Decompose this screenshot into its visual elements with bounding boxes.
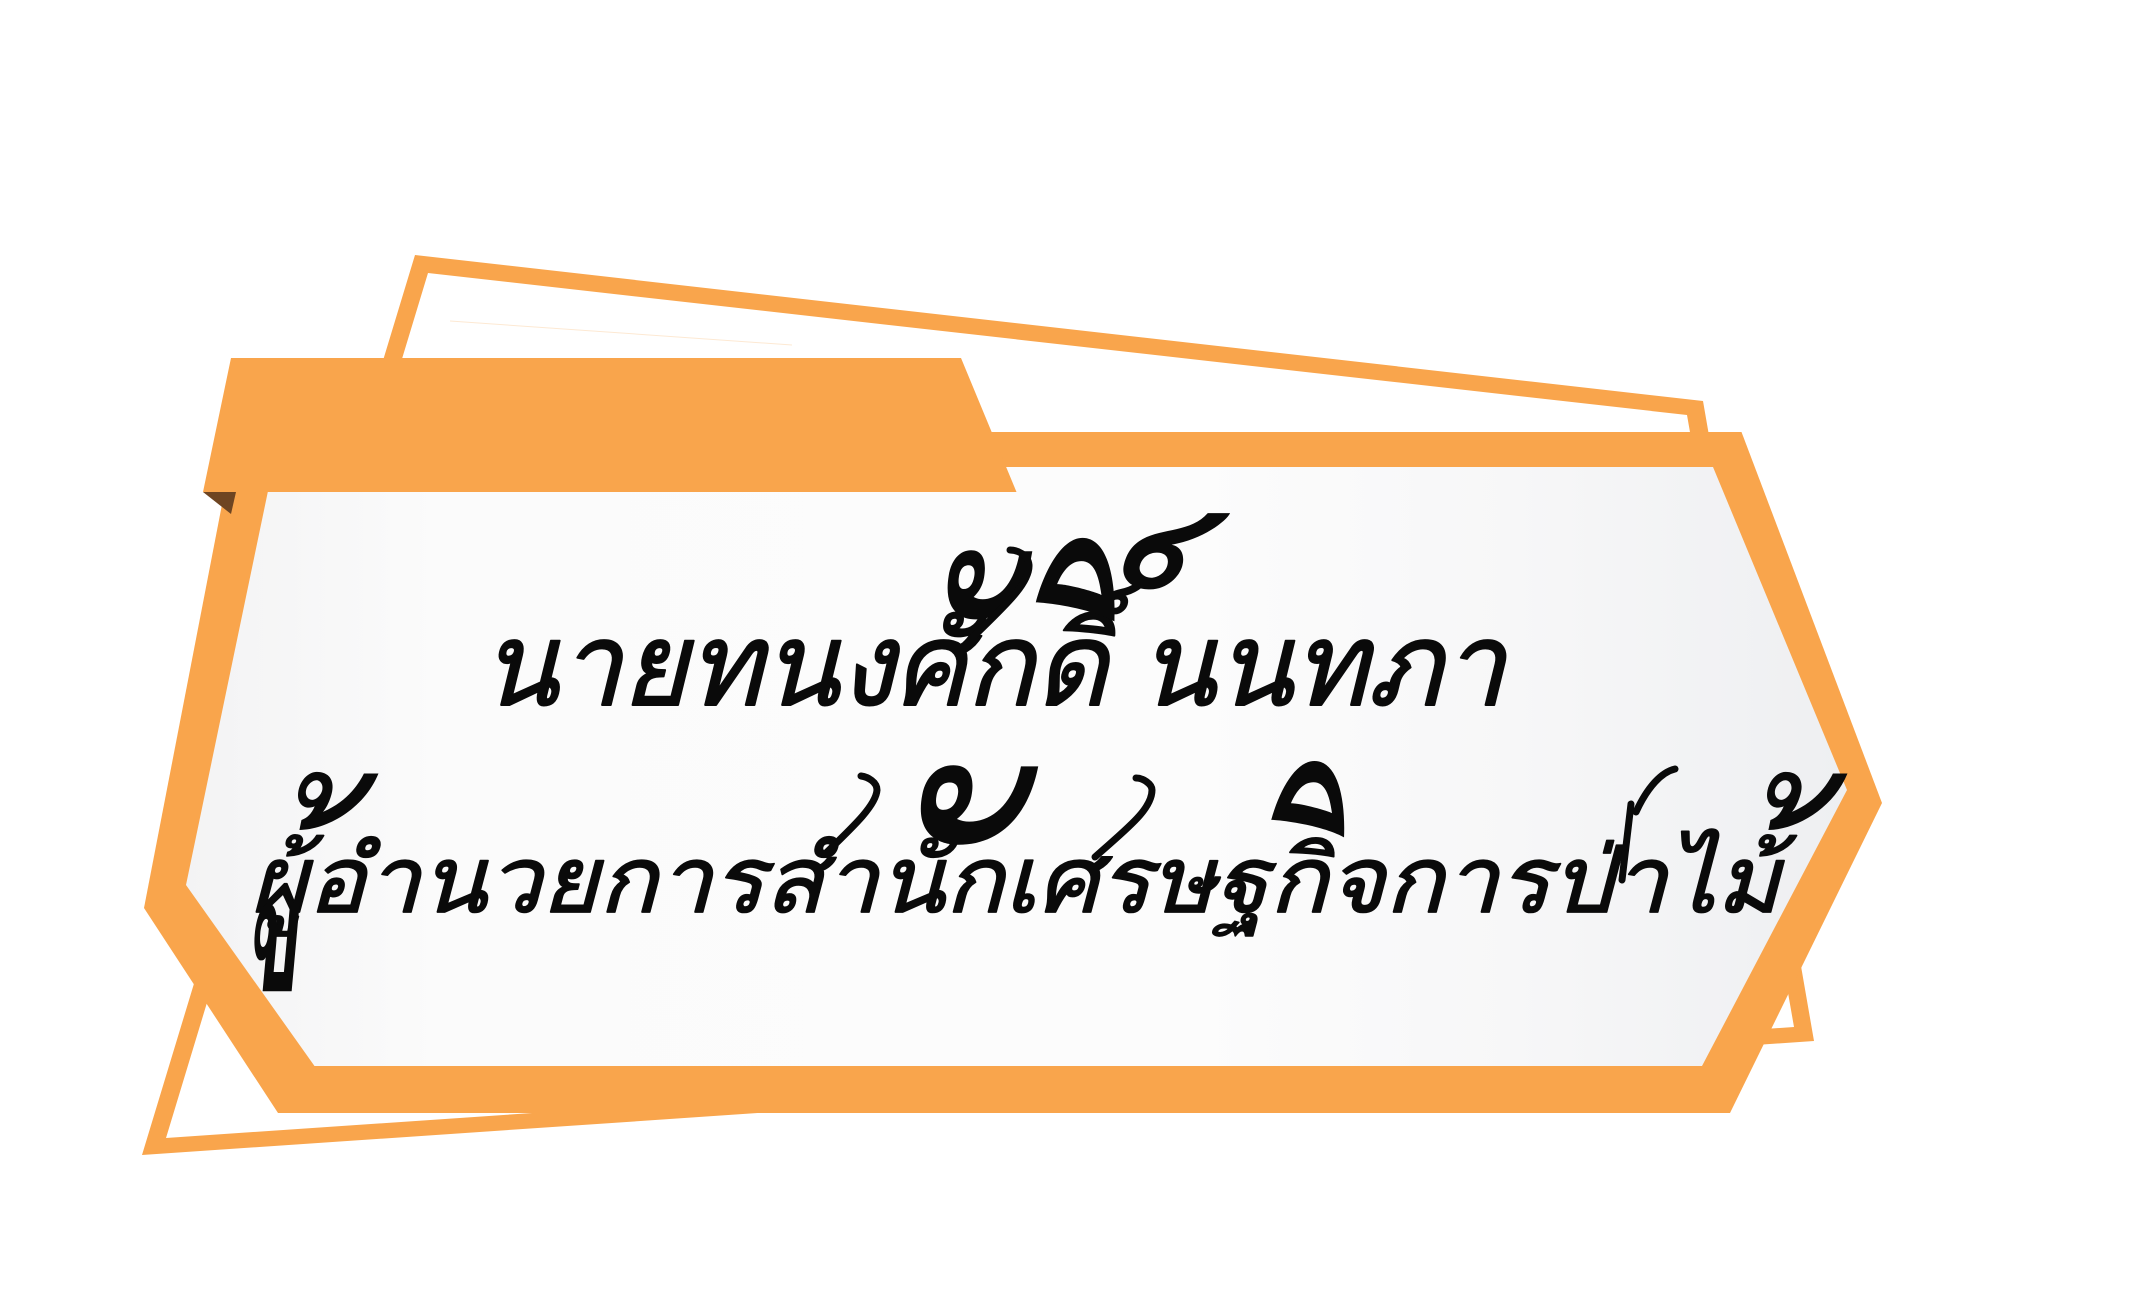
ribbon tab — [203, 358, 1016, 492]
panel: light interior — [186, 467, 1847, 1066]
faint line inside back frame — [450, 321, 792, 345]
enlarged decorative marks: ้ — [1727, 771, 1848, 1097]
back tilted frame — [142, 255, 1814, 1155]
enlarged decorative marks: ู — [253, 525, 312, 993]
letter flourishes — [826, 550, 1675, 880]
ribbon fold — [203, 492, 236, 514]
name text: นายทนงศักดิ์ นนทภา — [481, 582, 1508, 730]
job title text: ผู้อำนวยการสำนักเศรษฐกิจการป่าไม้ — [250, 828, 1797, 937]
enlarged decorative marks: ิ — [1035, 496, 1117, 954]
enlarged decorative marks: ิ — [1271, 724, 1347, 1142]
enlarged decorative marks: ์ — [1066, 512, 1231, 876]
enlarged decorative marks: ั — [895, 725, 1042, 1155]
panel: orange border — [144, 432, 1882, 1113]
enlarged decorative marks — [253, 496, 1848, 1155]
enlarged decorative marks: ้ — [258, 771, 379, 1097]
enlarged decorative marks: ั — [929, 515, 1035, 890]
